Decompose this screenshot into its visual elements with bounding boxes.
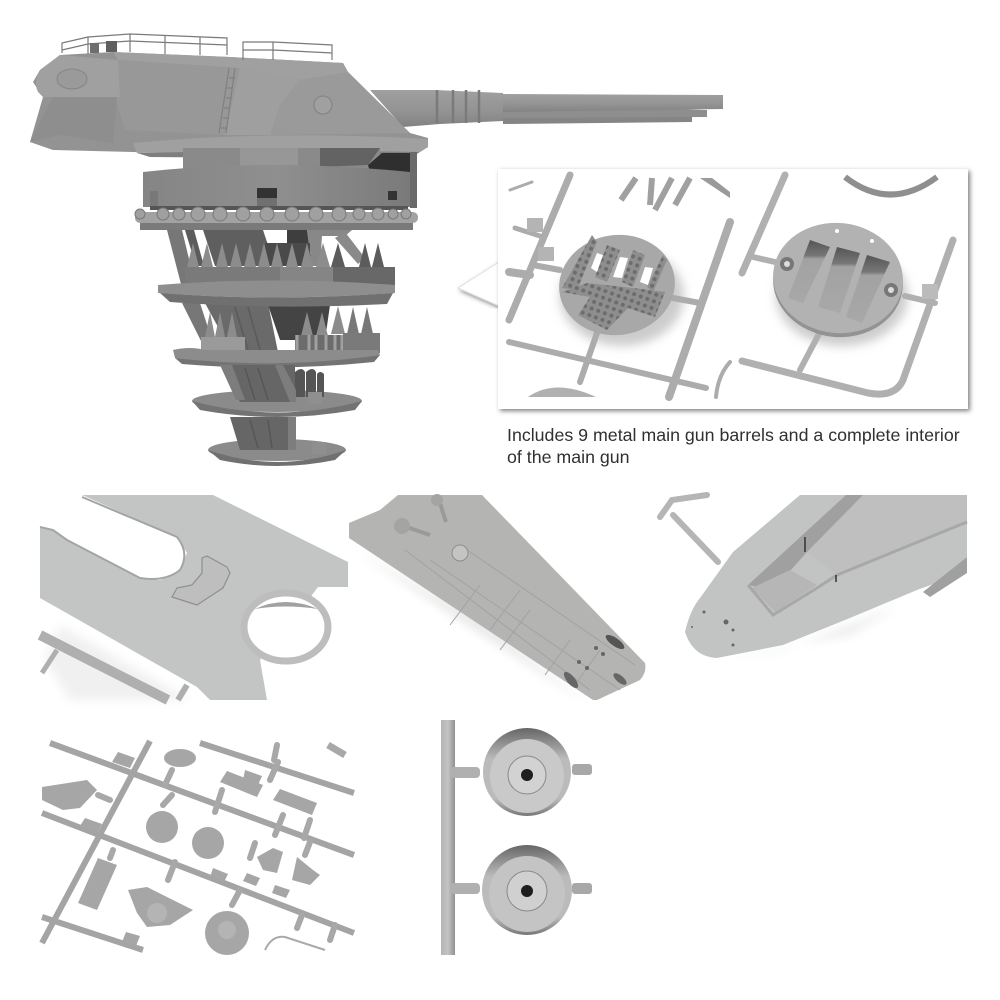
lower shell deck	[205, 306, 345, 337]
gun barrels	[370, 90, 723, 127]
photo: sprue with small parts	[42, 741, 354, 955]
ladder	[219, 68, 235, 133]
upper shell deck	[185, 267, 345, 286]
turret side housing	[36, 55, 120, 97]
round part bottom	[482, 845, 572, 935]
third deck	[192, 390, 362, 412]
round part top	[483, 728, 571, 816]
ring	[244, 593, 328, 661]
callout pointer	[458, 262, 499, 306]
photo: hull deck plate	[349, 494, 645, 705]
turret illustration	[30, 34, 723, 466]
photo: bow hull section	[660, 495, 967, 660]
upper ring	[143, 165, 410, 207]
caption: of the main gun	[507, 447, 630, 467]
caption: Includes 9 metal main gun barrels and a complete interior	[507, 425, 960, 445]
sprue runner	[40, 635, 187, 700]
photo: round parts on sprue	[441, 720, 592, 955]
deck slot rim	[40, 497, 184, 579]
bottom disc	[208, 439, 346, 461]
railings	[62, 34, 332, 60]
gun well disc	[768, 221, 908, 343]
turret housing	[30, 52, 428, 158]
toothed ring	[150, 206, 408, 210]
callout panel: sprue close-ups	[458, 169, 968, 409]
sprue gates	[98, 745, 335, 940]
right sprue photo	[742, 175, 953, 394]
hatch knob	[314, 96, 332, 114]
turret cutout outline	[172, 556, 230, 605]
ammo disc	[553, 227, 681, 343]
photo: deck with opening	[40, 495, 348, 700]
pedestal	[183, 148, 380, 170]
column and struts	[167, 230, 196, 288]
turret shelf	[133, 135, 428, 153]
left sprue photo	[509, 175, 730, 397]
